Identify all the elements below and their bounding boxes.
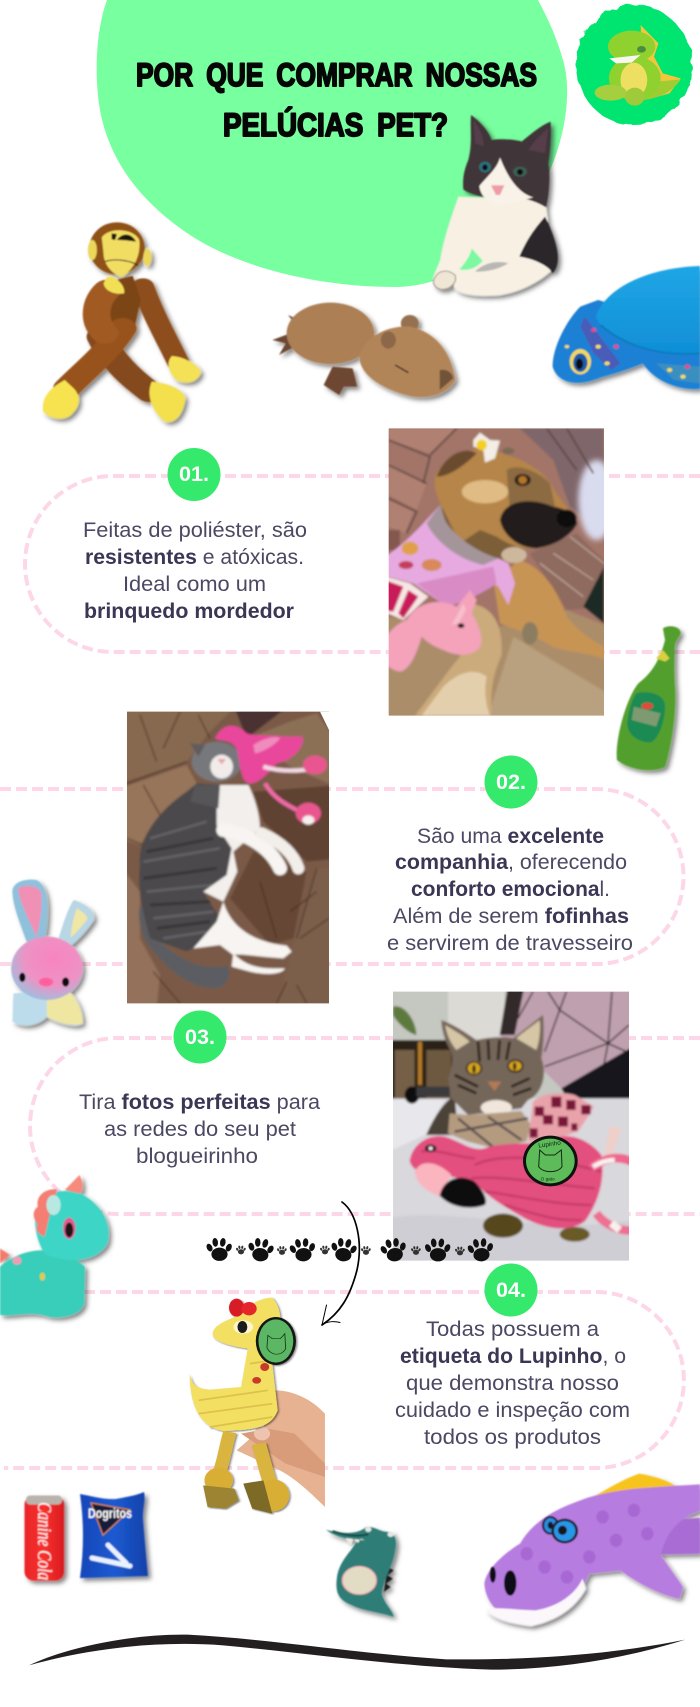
logo: green circle with dinosaur [576,5,692,125]
decoration: row of paw prints [205,1236,496,1264]
photo: tabby cat with flamingo toy [393,992,629,1261]
photo: tabby cat with flamingo toy: Lupinho [538,1140,562,1150]
number badge 04: 04. [496,1279,526,1302]
toy: blue sea turtle [553,266,700,389]
text block 4: que demonstra nosso [406,1371,619,1395]
text block 4: todos os produtos [424,1425,601,1449]
toy: blue chips bag [80,1492,148,1578]
toy: monkey plush [43,222,201,422]
text block 2: Além de serem fofinhas [393,904,629,928]
toy: capybara plush [272,303,455,397]
text block 1: Feitas de poliéster, são [83,518,307,542]
toy: green beer bottle [617,626,681,770]
panel 3 outline [30,1038,700,1214]
text block 2: São uma excelente [417,824,604,848]
toy: purple crocodile [484,1474,700,1626]
text block 1: resistentes e atóxicas. [85,545,304,569]
photo: tabby cat with flamingo toy: O gato [541,1177,555,1182]
toy: blue chips bag: Dogritos [88,1505,132,1521]
title: PELÚCIAS PET? [223,107,448,143]
panel 4 outline [4,1292,684,1468]
photo: dog with pig toy [388,428,604,716]
text block 3: as redes do seu pet [104,1117,296,1141]
text block 2: conforto emocional. [411,877,610,901]
text block 4: etiqueta do Lupinho, o [400,1344,626,1368]
panel 1 outline [25,476,700,652]
title: POR QUE COMPRAR NOSSAS [136,57,537,93]
text block 4 [395,1317,630,1449]
decorative black swoosh [29,1635,685,1670]
text block 2: e servirem de travesseiro [387,931,633,955]
toy: red cola can: Canine Cola [33,1502,55,1580]
toy: turquoise unicorn [0,1175,108,1317]
text block 2 [387,824,633,955]
toy: rainbow bunny [11,880,94,1025]
number badge 02 [484,756,538,808]
photo: tuxedo cat on blob [433,115,558,296]
number badge 03 [174,1010,226,1064]
text block 1 [83,518,307,623]
text block 4: cuidado e inspeção com [395,1398,630,1422]
toy: red cola can [24,1496,64,1580]
arrow [322,1202,359,1325]
number badge 03: 03. [185,1026,215,1049]
text block 3: blogueirinho [136,1144,258,1168]
toy: small teal crocodile [326,1527,396,1617]
text block 1: brinquedo mordedor [84,599,295,623]
dashed line panels [0,476,700,1468]
number badge 02: 02. [496,771,526,794]
text block 3 [79,1090,320,1168]
photo: gray cat with pink toy [127,712,329,1004]
text block 4: Todas possuem a [426,1317,599,1341]
text block 2: companhia, oferecendo [395,850,627,874]
text block 1: Ideal como um [123,572,266,596]
number badge 01: 01. [179,463,209,486]
panel 2 outline [0,789,684,964]
photo: yellow chicken-giraffe toy held in hand [190,1298,325,1514]
text block 3: Tira fotos perfeitas para [79,1090,320,1114]
title [136,57,537,143]
green title blob [97,0,567,287]
number badge 01 [168,448,220,501]
number badge 04 [484,1264,538,1316]
